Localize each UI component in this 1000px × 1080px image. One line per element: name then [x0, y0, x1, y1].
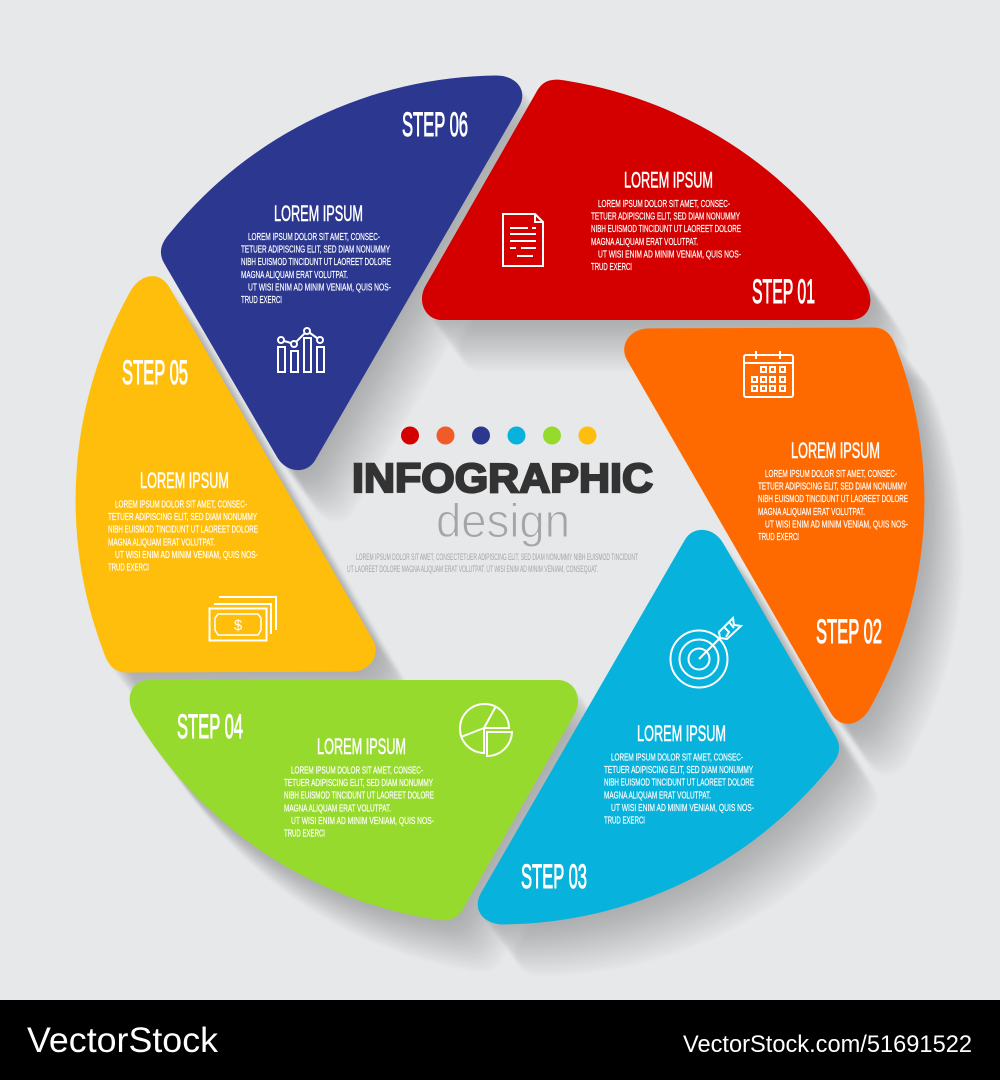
- step 03 heading: LOREM IPSUM: [637, 721, 726, 746]
- step 01 body text: MAGNA ALIQUAM ERAT VOLUTPAT.: [591, 237, 698, 248]
- step 01 body text: NIBH EUISMOD TINCIDUNT UT LAOREET DOLORE: [591, 224, 741, 235]
- step 04 body text: [284, 766, 434, 840]
- icon: pie chart: [460, 704, 512, 756]
- step 06 body text: NIBH EUISMOD TINCIDUNT UT LAOREET DOLORE: [241, 257, 391, 268]
- icon: bar and line chart: [278, 328, 324, 372]
- step 04 body text: UT WISI ENIM AD MINIM VENIAM, QUIS NOS-: [291, 816, 434, 827]
- center caption: [347, 552, 638, 575]
- panel: step 03: STEP 03: [521, 858, 587, 896]
- icon: target: [670, 618, 741, 688]
- step 05 body text: TETUER ADIPISCING ELIT, SED DIAM NONUMMY: [108, 512, 257, 523]
- step 03 body text: [604, 752, 754, 826]
- step 01 heading: LOREM IPSUM: [624, 168, 713, 192]
- step 02 body text: TETUER ADIPISCING ELIT, SED DIAM NONUMMY: [758, 482, 907, 493]
- step 06 body text: UT WISI ENIM AD MINIM VENIAM, QUIS NOS-: [248, 282, 391, 293]
- panel: step 03: [471, 522, 903, 1031]
- step 06 heading: LOREM IPSUM: [274, 201, 363, 226]
- step 04 body text: TETUER ADIPISCING ELIT, SED DIAM NONUMMY: [284, 778, 433, 789]
- step 05 body text: MAGNA ALIQUAM ERAT VOLUTPAT.: [108, 537, 215, 548]
- step 06 body text: TETUER ADIPISCING ELIT, SED DIAM NONUMMY: [241, 245, 390, 256]
- step 06 body text: LOREM IPSUM DOLOR SIT AMET, CONSEC-: [248, 232, 380, 243]
- step 03 body text: NIBH EUISMOD TINCIDUNT UT LAOREET DOLORE: [604, 778, 754, 789]
- icon: document: [503, 214, 543, 266]
- footer bar: [0, 1000, 1000, 1080]
- step 04 heading: LOREM IPSUM: [317, 734, 406, 759]
- step 05 body text: UT WISI ENIM AD MINIM VENIAM, QUIS NOS-: [115, 550, 258, 561]
- panel: step 06: STEP 06: [402, 106, 468, 144]
- step 01 body text: [591, 199, 741, 273]
- panel: step 02: STEP 02: [816, 613, 882, 651]
- step 05 body text: NIBH EUISMOD TINCIDUNT UT LAOREET DOLORE: [108, 525, 258, 536]
- step 02 body text: UT WISI ENIM AD MINIM VENIAM, QUIS NOS-: [765, 519, 908, 530]
- center caption: LOREM IPSUM DOLOR SIT AMET, CONSECTETUER ADIPISCING ELIT, SED DIAM NONUMMY NIBH EUISMOD TINCIDUNT: [356, 552, 638, 563]
- subtitle: design: [436, 494, 570, 547]
- panel: step 01: [422, 80, 870, 320]
- step 03 body text: LOREM IPSUM DOLOR SIT AMET, CONSEC-: [611, 752, 743, 764]
- step 03 body text: TRUD EXERCI: [604, 816, 645, 826]
- step 02 body text: TRUD EXERCI: [758, 532, 799, 543]
- step 01 body text: UT WISI ENIM AD MINIM VENIAM, QUIS NOS-: [598, 249, 741, 260]
- step 02 body text: [758, 469, 908, 543]
- step 04 body text: LOREM IPSUM DOLOR SIT AMET, CONSEC-: [291, 766, 423, 776]
- step 05 body text: [108, 500, 258, 574]
- step 03 body text: UT WISI ENIM AD MINIM VENIAM, QUIS NOS-: [611, 803, 754, 814]
- icon: calendar: [744, 351, 793, 397]
- center caption: UT LAOREET DOLORE MAGNA ALIQUAM ERAT VOLUTPAT. UT WISI ENIM AD MINIM VENIAM, CONSEQUAT.: [347, 564, 598, 575]
- step 05 body text: TRUD EXERCI: [108, 562, 149, 574]
- panel: step 06: [97, 0, 529, 478]
- step 02 body text: NIBH EUISMOD TINCIDUNT UT LAOREET DOLORE: [758, 494, 908, 505]
- footer brand: VectorStock: [27, 1021, 219, 1060]
- step 01 body text: TETUER ADIPISCING ELIT, SED DIAM NONUMMY: [591, 212, 740, 223]
- step 04 body text: MAGNA ALIQUAM ERAT VOLUTPAT.: [284, 803, 391, 814]
- panel: step 01: STEP 01: [752, 273, 815, 311]
- step 06 body text: TRUD EXERCI: [241, 295, 282, 306]
- step 01 body text: LOREM IPSUM DOLOR SIT AMET, CONSEC-: [598, 199, 730, 210]
- step 04 body text: NIBH EUISMOD TINCIDUNT UT LAOREET DOLORE: [284, 791, 434, 802]
- icon: money: [210, 597, 276, 640]
- step 06 body text: MAGNA ALIQUAM ERAT VOLUTPAT.: [241, 270, 348, 281]
- title: INFOGRAPHIC: [352, 455, 653, 501]
- center colour dots: [401, 426, 596, 444]
- step 05 body text: LOREM IPSUM DOLOR SIT AMET, CONSEC-: [115, 500, 247, 510]
- panel: step 04: STEP 04: [177, 708, 243, 746]
- step 05 heading: LOREM IPSUM: [140, 468, 229, 493]
- panel: step 04: [130, 680, 578, 920]
- panel: step 05: [0, 269, 383, 778]
- step 01 body text: TRUD EXERCI: [591, 262, 632, 273]
- step 04 body text: TRUD EXERCI: [284, 828, 325, 840]
- footer image id: VectorStock.com/51691522: [683, 1031, 972, 1058]
- step 02 heading: LOREM IPSUM: [791, 438, 880, 463]
- panel: step 05: STEP 05: [122, 354, 188, 392]
- step 03 body text: TETUER ADIPISCING ELIT, SED DIAM NONUMMY: [604, 765, 753, 776]
- step 02 body text: MAGNA ALIQUAM ERAT VOLUTPAT.: [758, 507, 865, 518]
- step 06 body text: [241, 232, 391, 306]
- panel: step 02: [617, 222, 1000, 731]
- step 03 body text: MAGNA ALIQUAM ERAT VOLUTPAT.: [604, 790, 711, 801]
- icon: money: $: [234, 617, 243, 634]
- step 02 body text: LOREM IPSUM DOLOR SIT AMET, CONSEC-: [765, 469, 897, 480]
